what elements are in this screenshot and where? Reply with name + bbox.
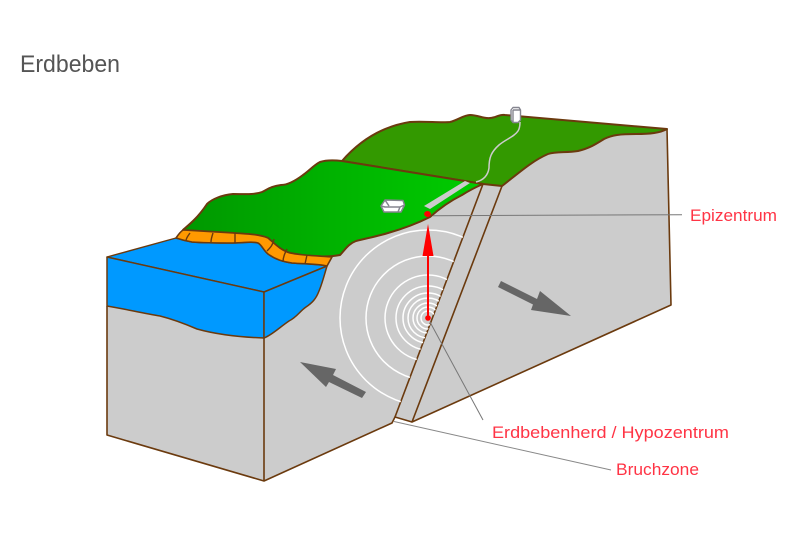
panel: water surface and sea bbox=[107, 238, 327, 338]
cable to seismograph bbox=[476, 122, 520, 182]
panel: left rock block bbox=[107, 184, 483, 481]
label: Epizentrum: Epizentrum bbox=[690, 206, 777, 225]
icon: house bbox=[381, 200, 404, 212]
panel: back green land surface bbox=[342, 115, 667, 186]
road on front block bbox=[424, 181, 470, 209]
panel: orange coastal strip bbox=[176, 230, 332, 266]
fault lines bbox=[395, 129, 671, 422]
leader line: Epizentrum bbox=[433, 215, 682, 216]
panel: right rock block bbox=[412, 129, 671, 422]
hypocentre dot bbox=[425, 315, 431, 321]
arrow: left block moves away bbox=[300, 362, 366, 398]
epicentre dot bbox=[424, 211, 431, 217]
infographic: earthquake block diagram bbox=[22, 54, 776, 482]
title: Erdbeben bbox=[20, 51, 120, 78]
seismic wave rings bbox=[339, 229, 464, 402]
icon: seismograph station bbox=[511, 108, 520, 122]
leader line: Bruchzone bbox=[394, 422, 611, 470]
panel: fault zone bbox=[395, 184, 502, 422]
arrow: right block moves away bbox=[498, 281, 571, 316]
leader line: Hypozentrum bbox=[430, 322, 483, 420]
arrow: seismic rise to epicentre bbox=[422, 224, 434, 318]
label: Bruchzone: Bruchzone bbox=[616, 460, 699, 479]
panel: front green land surface bbox=[183, 160, 483, 256]
label: Erdbebenherd / Hypozentrum: Erdbebenherd / Hypozentrum bbox=[492, 423, 729, 442]
